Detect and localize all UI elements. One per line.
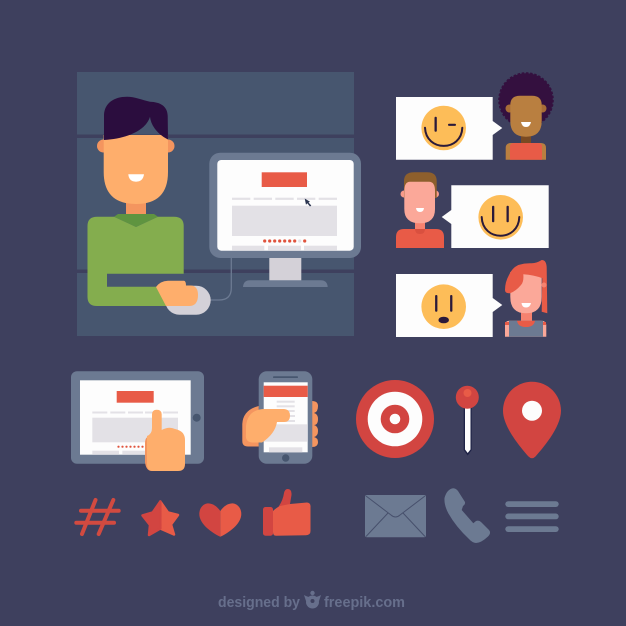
- icon: happy smiley: [478, 195, 523, 240]
- hand pointing at tablet: [145, 410, 185, 471]
- icon: hashtag: [76, 500, 119, 534]
- icon: smartphone with hand: [242, 371, 318, 464]
- icon: telephone handset: [444, 488, 490, 543]
- panel: wink feedback bubble: [396, 97, 502, 160]
- person: afro hair: [499, 73, 553, 160]
- icon: freepik logo: [304, 591, 321, 608]
- hand: [156, 281, 198, 306]
- icon: tablet with hand: [71, 371, 204, 471]
- person: short brown hair: [396, 172, 444, 248]
- icon: heart: [199, 503, 241, 537]
- icon: target: [356, 380, 434, 458]
- attribution text: freepik.com: [324, 594, 405, 611]
- icon: map marker: [503, 382, 561, 458]
- computer mouse: [165, 286, 211, 315]
- person: red hair: [505, 260, 547, 337]
- panel: surprised feedback bubble: [396, 274, 502, 337]
- person: [88, 97, 211, 315]
- monitor: [209, 153, 361, 287]
- icon: cursor: [305, 198, 311, 206]
- icon: mouse cable: [208, 256, 231, 300]
- icon: envelope: [365, 495, 426, 537]
- icon: winking smiley: [421, 106, 466, 150]
- icon: surprised smiley: [421, 284, 466, 329]
- panel: happy feedback bubble: [442, 185, 549, 248]
- icon: star: [142, 502, 178, 535]
- icon: hamburger menu: [505, 501, 559, 532]
- icon: thumbs up: [263, 489, 311, 536]
- attribution text: [218, 591, 405, 611]
- panel: person at desktop computer: [77, 72, 361, 336]
- attribution text: designed by: [218, 594, 301, 611]
- icon: push pin: [456, 386, 479, 456]
- hand holding phone: [242, 406, 290, 446]
